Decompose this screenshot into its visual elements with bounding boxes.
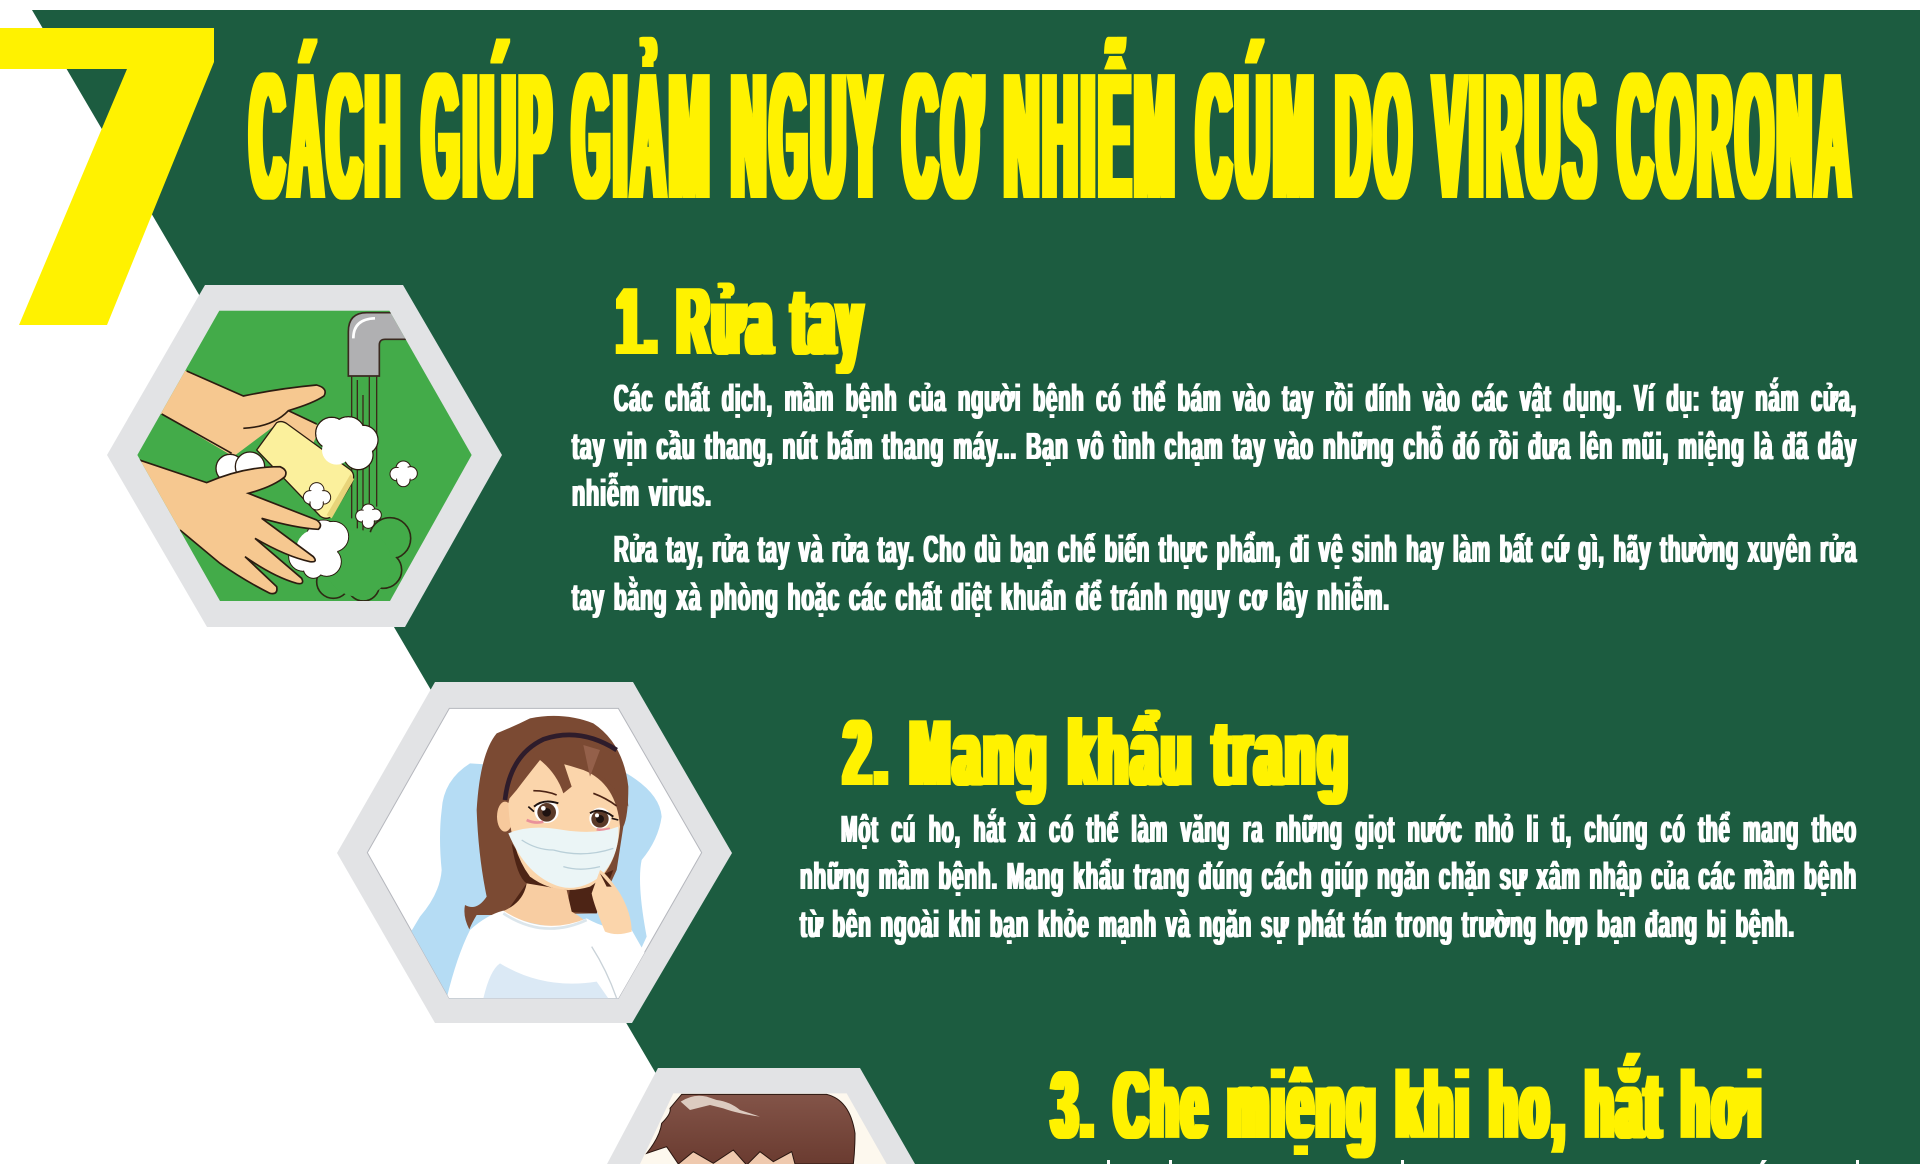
text block 2 — [800, 807, 1857, 946]
text block 1 — [572, 376, 1857, 619]
text block 1: nhiễm virus. — [572, 471, 712, 515]
hexagon frame 1 — [107, 285, 502, 627]
icon: top of a head with brown hair — [640, 1093, 887, 1164]
heading 2: 2. Mang khẩu trang — [844, 700, 1351, 805]
hexagon frame 3 — [607, 1068, 915, 1164]
big yellow number 7 — [0, 28, 214, 325]
hexagon frame 2 — [337, 682, 732, 1023]
panel: step 3 covering the mouth — [607, 1052, 1859, 1164]
panel: step 2 wearing a mask — [337, 682, 1857, 1023]
icon: woman wearing a face mask — [367, 708, 702, 998]
panel: step 1 hand washing — [107, 268, 1857, 627]
cropped tops of the next text line — [1107, 1160, 1859, 1164]
icon: hands washing with soap — [133, 307, 477, 607]
panel: step 1 hand washing: 1. Rửa tay — [617, 268, 865, 375]
